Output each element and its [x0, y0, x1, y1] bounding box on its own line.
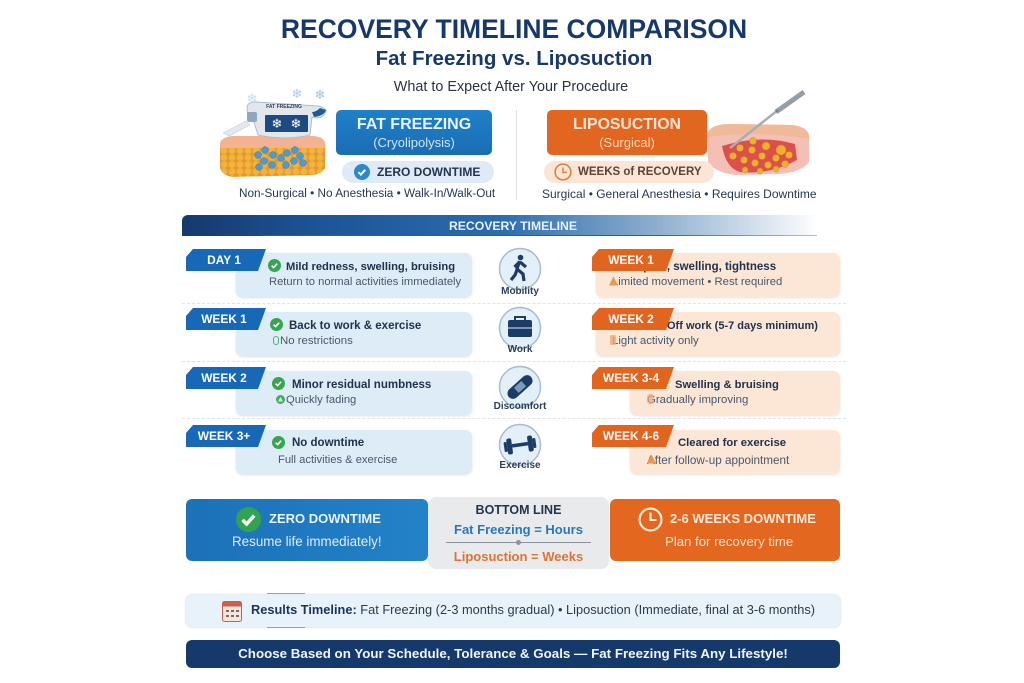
badge text: ZERO DOWNTIME	[377, 165, 480, 179]
icon: fat freezing device illustration: FAT FREEZING	[266, 104, 302, 110]
detail: Full activities & exercise	[278, 454, 397, 466]
icon: check	[272, 436, 285, 449]
icon: fat freezing device illustration: ❄	[315, 88, 325, 103]
fat freezing attributes: Non-Surgical • No Anesthesia • Walk-In/Walk-Out	[239, 187, 495, 200]
banner: call to action: Choose Based on Your Schedule, Tolerance & Goals — Fat Freezing Fits Any Lifestyle!	[238, 646, 788, 661]
tag: week 2	[186, 367, 266, 389]
icon: calendar	[222, 601, 242, 622]
label: discomfort: Discomfort	[494, 401, 546, 412]
panel: results timeline	[186, 595, 840, 627]
surgical label: (Surgical)	[599, 135, 655, 150]
panel: fat freezing week 3+	[236, 430, 472, 474]
label: work: Work	[508, 344, 532, 355]
tag: liposuction week 4-6	[592, 425, 674, 447]
tag: liposuction week 2	[592, 308, 674, 330]
panel: fat freezing week 2	[236, 371, 472, 415]
tag: liposuction week 1: WEEK 1	[608, 253, 654, 267]
detail: Return to normal activities immediately	[269, 276, 461, 288]
heading: Off work (5-7 days minimum)	[667, 320, 818, 332]
detail: After follow-up appointment	[647, 454, 789, 467]
panel: liposuction week 4-6	[630, 430, 840, 474]
fat freezing label: FAT FREEZING	[357, 116, 471, 133]
detail: Light activity only	[612, 335, 699, 347]
tag: liposuction week 4-6: WEEK 4-6	[603, 429, 659, 443]
tag: week 3+: WEEK 3+	[198, 429, 250, 443]
icon: check	[268, 259, 281, 272]
heading: No downtime	[292, 437, 364, 449]
cryolipolysis label: (Cryolipolysis)	[373, 135, 455, 150]
heading: Back to work & exercise	[289, 320, 421, 332]
panel: liposuction header	[547, 110, 707, 155]
summary heading: ZERO DOWNTIME	[269, 511, 381, 526]
label: exercise: Exercise	[499, 460, 541, 471]
badge: zero downtime	[342, 161, 494, 183]
icon: check	[354, 164, 370, 180]
summary heading: 2-6 WEEKS DOWNTIME	[670, 511, 816, 526]
icon: fat freezing device illustration: ❄	[247, 92, 257, 107]
summary text: Resume life immediately!	[232, 534, 382, 549]
tag: liposuction week 3-4: WEEK 3-4	[603, 371, 659, 385]
bottom line heading: BOTTOM LINE	[476, 503, 561, 517]
icon: clock	[638, 508, 662, 532]
label: mobility: Mobility	[501, 286, 539, 297]
panel: liposuction week 1	[596, 253, 840, 297]
panel: fat freezing header	[336, 110, 492, 155]
icon: check	[270, 318, 283, 331]
icon: mobility	[498, 248, 542, 290]
icon: check	[272, 377, 285, 390]
tag: day 1	[186, 249, 266, 271]
icon: fat freezing device illustration: ❄	[292, 87, 302, 102]
tag: liposuction week 1	[592, 249, 674, 271]
liposuction equals weeks: Liposuction = Weeks	[454, 549, 583, 564]
tag: week 1	[186, 308, 266, 330]
liposuction label: LIPOSUCTION	[573, 116, 681, 133]
bar text: RECOVERY TIMELINE	[449, 219, 577, 233]
icon: small green triangle marker	[276, 395, 285, 404]
icon: small warning marker	[647, 454, 656, 464]
tag: liposuction week 3-4	[592, 367, 674, 389]
icon: clock	[554, 163, 572, 181]
panel: liposuction week 2	[596, 312, 840, 356]
results text: Results Timeline: Fat Freezing (2-3 months gradual) • Liposuction (Immediate, final at 3-6 months)	[251, 602, 815, 617]
tagline: What to Expect After Your Procedure	[394, 79, 628, 95]
summary text: Plan for recovery time	[665, 534, 793, 549]
icon: small warning marker	[609, 276, 618, 286]
icon: small marker	[647, 394, 654, 404]
heading: recovery timeline bar	[182, 215, 818, 236]
subtitle: Fat Freezing vs. Liposuction	[376, 47, 652, 70]
title: RECOVERY TIMELINE COMPARISON	[281, 14, 747, 44]
icon: exercise dumbbell	[498, 424, 542, 466]
tag: day 1: DAY 1	[207, 253, 241, 267]
panel: bottom line	[428, 497, 609, 569]
badge: weeks of recovery	[544, 161, 714, 183]
icon: fat freezing device illustration: ❄	[291, 117, 301, 132]
icon: small green marker	[273, 336, 279, 345]
detail: Gradually improving	[647, 394, 748, 406]
heading: Mild redness, swelling, bruising	[286, 261, 455, 273]
panel: weeks downtime summary	[610, 499, 840, 561]
icon: fat freezing device illustration	[220, 87, 327, 177]
tag: week 3+	[186, 425, 266, 447]
icon: fat freezing device illustration: ❄	[272, 117, 282, 132]
icon: small marker	[610, 335, 616, 345]
tag: week 1: WEEK 1	[201, 312, 247, 326]
liposuction attributes: Surgical • General Anesthesia • Requires Downtime	[542, 187, 817, 201]
heading: Minor residual numbness	[292, 379, 431, 391]
detail: No restrictions	[280, 335, 353, 347]
panel: fat freezing week 1	[236, 312, 472, 356]
tag: liposuction week 2: WEEK 2	[608, 312, 654, 326]
detail: Quickly fading	[286, 394, 356, 406]
tag: week 2: WEEK 2	[201, 371, 247, 385]
badge text: WEEKS of RECOVERY	[578, 166, 702, 178]
heading: Mild pain, swelling, tightness	[617, 261, 776, 273]
panel: zero downtime summary	[186, 499, 428, 561]
icon: liposuction illustration	[708, 90, 809, 175]
banner: call to action	[186, 640, 840, 668]
fat freezing equals hours: Fat Freezing = Hours	[454, 522, 583, 537]
icon: discomfort bandage	[498, 366, 542, 408]
icon: work	[498, 306, 542, 350]
heading: Cleared for exercise	[678, 437, 786, 449]
panel: fat freezing day 1	[236, 253, 472, 297]
icon: green check	[236, 507, 261, 532]
panel: liposuction week 3-4	[630, 371, 840, 415]
heading: Swelling & bruising	[675, 379, 779, 391]
detail: Limited movement • Rest required	[612, 276, 782, 288]
